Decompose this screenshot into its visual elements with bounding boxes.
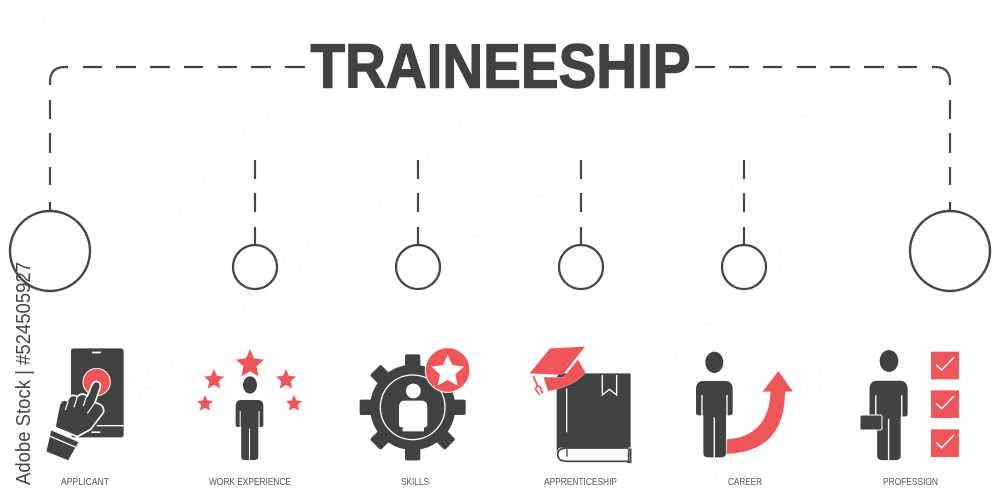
node: skills connector [396, 160, 440, 289]
icon: skills gear with person and star badge [360, 348, 470, 460]
title: TRAINEESHIP [310, 32, 690, 102]
label: profession: PROFESSION [883, 476, 938, 488]
icon: profession person, briefcase and checklist [860, 350, 959, 461]
label: career: CAREER [728, 476, 762, 488]
label: apprenticeship: APPRENTICESHIP [544, 476, 617, 488]
label: skills: SKILLS [401, 476, 429, 488]
node: large right circle [910, 211, 990, 291]
icon: apprenticeship book and graduation cap [530, 347, 631, 462]
node: career connector [722, 160, 766, 289]
stars [197, 349, 302, 411]
person [236, 376, 263, 460]
node: large left circle [10, 211, 90, 291]
icon: work experience person and stars [197, 349, 302, 460]
dashed connector: right [695, 67, 950, 211]
icon: career person and rising arrow [696, 352, 793, 458]
label: work experience: WORK EXPERIENCE [209, 476, 291, 488]
dashed connector: left [50, 67, 305, 211]
node: work experience connector [233, 160, 277, 289]
label: applicant: APPLICANT [61, 476, 109, 488]
icon: applicant phone and hand [46, 348, 124, 461]
stock credit: Adobe Stock | #524505927 [13, 262, 35, 485]
node: apprenticeship connector [559, 160, 603, 289]
